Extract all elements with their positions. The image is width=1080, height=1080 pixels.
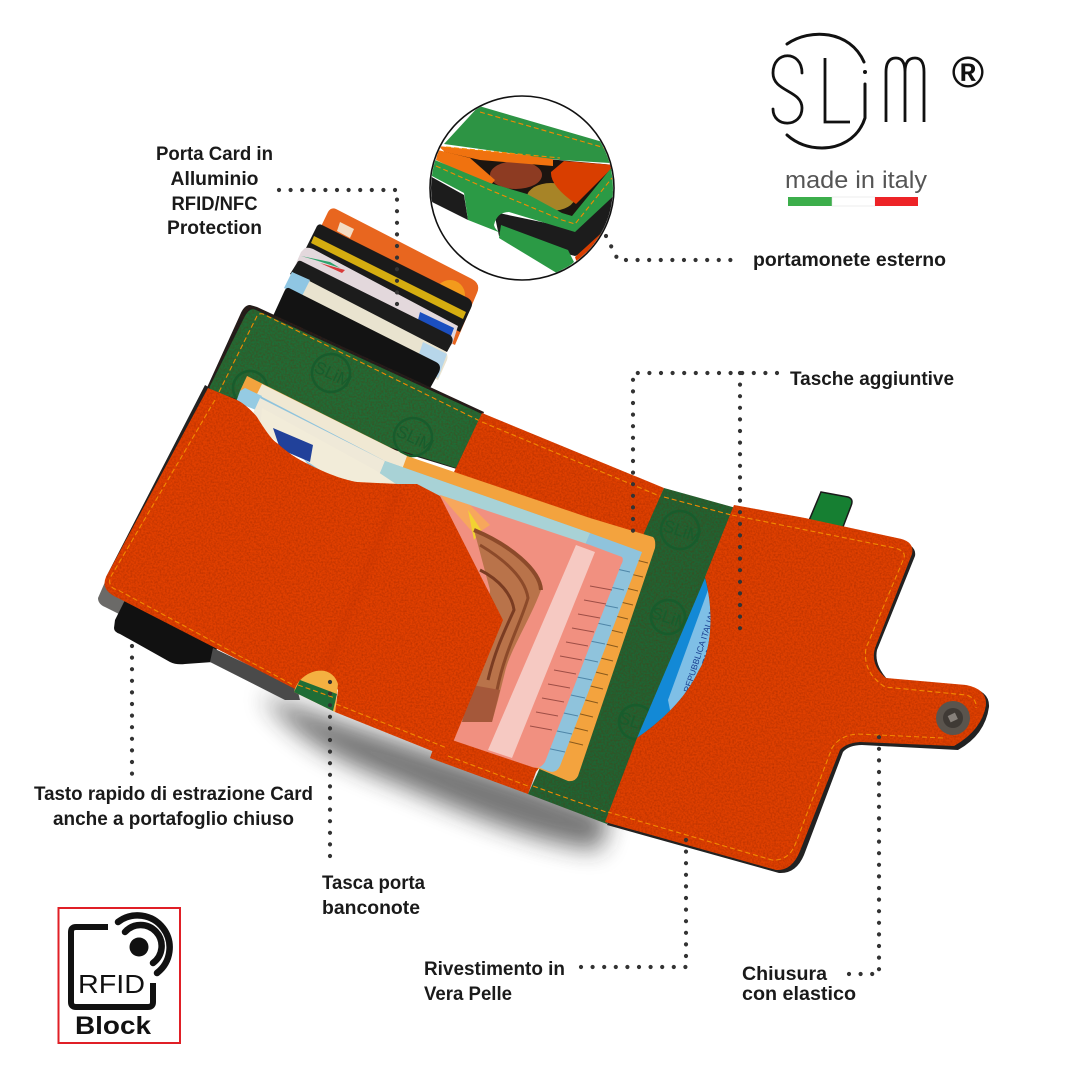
orange lining top [438, 146, 553, 166]
black card 2 [290, 261, 453, 352]
italian flag bar [788, 197, 918, 206]
orange 50 note [247, 376, 655, 781]
label: porta card: Alluminio [170, 169, 258, 190]
logo mark 2 [388, 412, 441, 463]
orange bottom strip [430, 700, 560, 794]
green leather stitching [219, 314, 480, 421]
banknotes [236, 376, 655, 781]
ID card [280, 272, 448, 380]
letter S [773, 56, 802, 123]
leader: porta card [279, 190, 397, 312]
wallet shadow [262, 695, 610, 850]
logo mark 3 [227, 365, 273, 411]
logo mark 1 [306, 348, 359, 399]
label: tasto rapido: Tasto rapido di estrazione Card [34, 784, 313, 805]
pocket fold crease [325, 490, 398, 672]
logo mark 4: SLiM [661, 516, 703, 546]
made in italy: made in italy [785, 167, 927, 194]
top arc [787, 34, 864, 62]
logo [773, 34, 924, 148]
bottom notch [294, 671, 338, 712]
white note with flag [260, 408, 420, 500]
embossed logos right [615, 506, 707, 745]
health card [637, 578, 710, 738]
black extraction tab [114, 600, 218, 664]
signal arcs [118, 915, 170, 973]
black frame right [494, 190, 622, 256]
pink 10 note [440, 495, 623, 768]
snap button [936, 701, 970, 735]
leader: portamonete [606, 236, 738, 260]
blue 20 note [245, 388, 642, 772]
leader: tasto [130, 646, 134, 776]
label: tasca: banconote [322, 898, 420, 919]
orange lining left [436, 150, 495, 186]
metal cardholder base [98, 582, 300, 700]
label: porta card: Protection [167, 218, 262, 239]
label: chiusura [742, 964, 856, 1005]
label: tasto rapido [34, 784, 313, 830]
red tip [575, 234, 601, 261]
black front card [273, 288, 440, 392]
bottom strip stitching [448, 756, 528, 786]
leader: tasca [328, 682, 332, 856]
letter L [825, 58, 850, 122]
badge border [58, 908, 180, 1043]
label: porta card: RFID/NFC [172, 194, 258, 215]
label: rivestimento: Rivestimento in [424, 959, 565, 980]
dark metal edge [210, 648, 300, 700]
wallet interior green left [205, 305, 484, 470]
flap stitching [608, 515, 976, 860]
inset circle: coin pocket [428, 96, 630, 280]
lower green strip [499, 225, 574, 275]
logo mark 4 [656, 506, 707, 555]
pink note ticks [530, 586, 612, 730]
label: porta card [156, 144, 273, 239]
panel stitching [110, 400, 447, 748]
panel leather [104, 388, 503, 757]
brown arch [462, 530, 541, 722]
RFID text: RFID [78, 969, 145, 999]
label: chiusura: Chiusura [742, 964, 827, 985]
label: chiusura: con elastico [742, 984, 856, 1005]
right flap leather [605, 505, 986, 870]
orange card [300, 208, 478, 345]
logo mark 5: SLiM [649, 603, 691, 633]
registered mark: ® [952, 48, 984, 97]
logo mark 6: SLiM [617, 708, 659, 738]
green strap [805, 492, 852, 540]
wallet interior green middle [528, 488, 736, 824]
signal dot [130, 938, 148, 956]
card stack [273, 208, 478, 392]
card text: REPUBBLICA ITALIANA [681, 602, 720, 694]
card outline icon [71, 927, 153, 1007]
leader: tasche [633, 373, 777, 634]
green top flap [444, 106, 610, 163]
label: tasto rapido: anche a portafoglio chiuso [53, 809, 294, 830]
label: portamonete: portamonete esterno [753, 250, 946, 271]
coin pocket interior [444, 151, 612, 216]
green body [430, 158, 622, 233]
copper coin [490, 161, 542, 189]
RFID block badge [58, 908, 180, 1043]
logo mark 1: SLiM [311, 358, 355, 391]
label: porta card: Porta Card in [156, 144, 273, 165]
black card [304, 224, 472, 332]
card text: SANITARIA [689, 647, 716, 702]
black frame left [431, 177, 468, 220]
orange strip stitching [482, 422, 662, 497]
gold coin [527, 183, 575, 211]
label: tasca [322, 873, 425, 919]
panel edge shadow [106, 385, 210, 594]
logo mark 6 [615, 701, 662, 745]
label: rivestimento [424, 959, 565, 1005]
silver corner [98, 582, 130, 617]
leader: chiusura [849, 726, 879, 974]
yellow stripe [311, 236, 466, 319]
left pocket panel [104, 385, 503, 757]
label: rivestimento: Vera Pelle [424, 984, 512, 1005]
leader: rivestimento [581, 836, 686, 967]
right flap edge shadow [607, 507, 989, 873]
logo mark 2: SLiM [393, 422, 437, 455]
letter j with bottom arc [787, 84, 865, 148]
card text [684, 609, 710, 692]
orange inner flap [551, 161, 615, 204]
letter M [886, 58, 924, 122]
label: tasca: Tasca porta [322, 873, 425, 894]
embossed logos left [227, 348, 441, 463]
label: tasche: Tasche aggiuntive [790, 369, 954, 390]
wallet spine strip orange [440, 413, 664, 600]
logo mark 5 [647, 596, 694, 640]
hologram band [488, 545, 595, 758]
middle stitching [664, 497, 735, 516]
inset stitching [436, 166, 612, 224]
Block text: Block [75, 1012, 151, 1040]
white card [294, 248, 458, 345]
dot of j [863, 70, 867, 74]
